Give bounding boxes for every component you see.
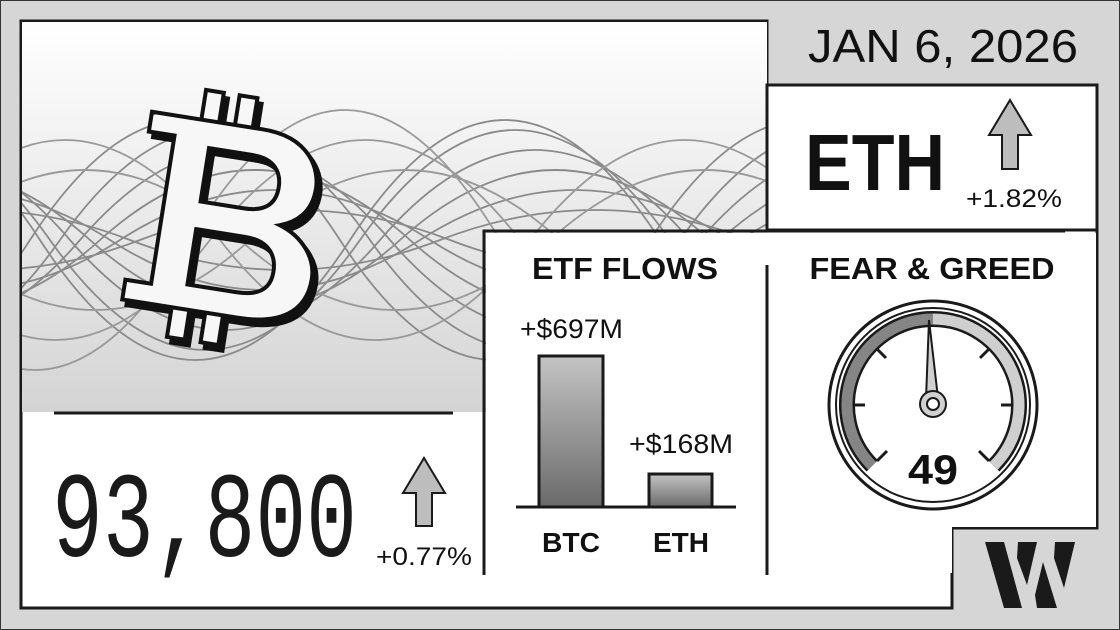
bar chart: ETF flows: +$697M [520, 314, 623, 344]
heading: FEAR & GREED: FEAR & GREED [810, 251, 1054, 286]
icon: bitcoin logo [117, 82, 343, 364]
text: BTC price: 93,800 [52, 454, 357, 593]
text: BTC change: +0.77% [376, 543, 472, 571]
bar chart: ETF flows: BTC [542, 527, 600, 558]
text: ETH change: +1.82% [966, 185, 1062, 213]
chart: fear and greed gauge: 49 [908, 446, 958, 493]
bar chart: ETF flows: ETH [653, 527, 709, 558]
panel: bitcoin hero image [22, 22, 767, 412]
text: date: JAN 6, 2026 [808, 20, 1078, 72]
bar chart: ETF flows [516, 314, 736, 558]
icon: BTC up arrow [403, 458, 445, 526]
icon: W logo [985, 542, 1075, 608]
text: ETH label: ETH [805, 118, 945, 207]
panel: ETH price change [767, 85, 1097, 230]
bar chart: ETF flows: +$168M [629, 429, 733, 459]
chart: fear and greed gauge [829, 301, 1037, 509]
panel: ETF flows and fear greed [484, 231, 1096, 575]
icon: ETH up arrow [989, 100, 1031, 169]
heading: ETF FLOWS: ETF FLOWS [532, 251, 718, 286]
